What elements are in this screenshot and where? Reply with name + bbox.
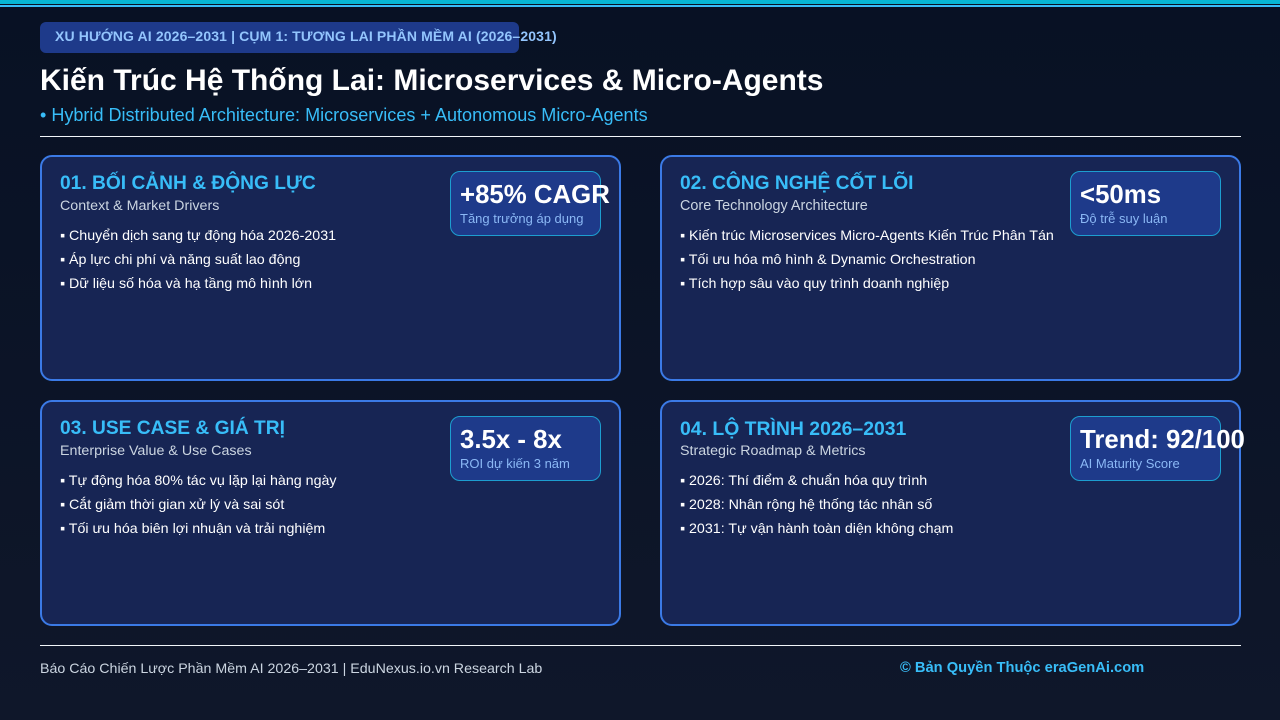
bullet list: ▪ 2031: Tự vận hành toàn diện không chạm bbox=[680, 521, 953, 537]
metric callout: ROI dự kiến 3 năm bbox=[460, 456, 570, 471]
panel subheading: Core Technology Architecture bbox=[680, 198, 868, 214]
panel: 02 core technology bbox=[660, 155, 1241, 381]
bullet list: ▪ Tối ưu hóa mô hình & Dynamic Orchestration bbox=[680, 252, 976, 268]
panel heading: 01. BỐI CẢNH & ĐỘNG LỰC bbox=[60, 173, 316, 194]
metric callout: 3.5x - 8x bbox=[460, 426, 562, 454]
panel subheading: Strategic Roadmap & Metrics bbox=[680, 443, 866, 459]
bullet list: ▪ Áp lực chi phí và năng suất lao động bbox=[60, 252, 300, 268]
bullet list: ▪ 2026: Thí điểm & chuẩn hóa quy trình bbox=[680, 473, 927, 489]
bullet list: ▪ Kiến trúc Microservices Micro-Agents Kiến Trúc Phân Tán bbox=[680, 228, 1054, 244]
metric callout bbox=[1070, 416, 1221, 481]
title: Kiến Trúc Hệ Thống Lai: Microservices & Micro-Agents bbox=[40, 64, 824, 97]
footer copyright: © Bản Quyền Thuộc eraGenAi.com bbox=[900, 660, 1144, 676]
metric callout: <50ms bbox=[1080, 181, 1161, 209]
panel heading: 03. USE CASE & GIÁ TRỊ bbox=[60, 418, 285, 439]
panel: 01 context bbox=[40, 155, 621, 381]
bullet list: ▪ Chuyển dịch sang tự động hóa 2026-2031 bbox=[60, 228, 336, 244]
metric callout: AI Maturity Score bbox=[1080, 456, 1180, 471]
metric callout bbox=[450, 416, 601, 481]
bullet list bbox=[680, 473, 953, 537]
panel: 03 use cases bbox=[40, 400, 621, 626]
badge: series label bbox=[40, 22, 519, 53]
footer source text: Báo Cáo Chiến Lược Phần Mềm AI 2026–2031 | EduNexus.io.vn Research Lab bbox=[40, 661, 542, 677]
bullet list: ▪ 2028: Nhân rộng hệ thống tác nhân số bbox=[680, 497, 932, 513]
badge: series label: XU HƯỚNG AI 2026–2031 | CỤM 1: TƯƠNG LAI PHẦN MỀM AI (2026–2031) bbox=[55, 28, 557, 44]
metric callout: +85% CAGR bbox=[460, 181, 610, 209]
bullet list: ▪ Tối ưu hóa biên lợi nhuận và trải nghiệm bbox=[60, 521, 325, 537]
footer divider bbox=[40, 645, 1241, 646]
metric callout: Độ trễ suy luận bbox=[1080, 211, 1167, 226]
metric callout bbox=[1070, 171, 1221, 236]
bullet list bbox=[60, 228, 336, 292]
bullet list: ▪ Tự động hóa 80% tác vụ lặp lại hàng ngày bbox=[60, 473, 337, 489]
metric callout: Tăng trưởng áp dụng bbox=[460, 211, 583, 226]
bullet list: ▪ Cắt giảm thời gian xử lý và sai sót bbox=[60, 497, 284, 513]
bullet list: ▪ Dữ liệu số hóa và hạ tầng mô hình lớn bbox=[60, 276, 312, 292]
panel subheading: Enterprise Value & Use Cases bbox=[60, 443, 252, 459]
bullet list: ▪ Tích hợp sâu vào quy trình doanh nghiệp bbox=[680, 276, 949, 292]
bullet list bbox=[60, 473, 337, 537]
subtitle: • Hybrid Distributed Architecture: Microservices + Autonomous Micro-Agents bbox=[40, 105, 648, 125]
panel subheading: Context & Market Drivers bbox=[60, 198, 219, 214]
header divider bbox=[40, 136, 1241, 137]
metric callout: Trend: 92/100 bbox=[1080, 426, 1245, 454]
bullet list bbox=[680, 228, 1054, 292]
metric callout bbox=[450, 171, 601, 236]
top accent bars bbox=[0, 0, 1280, 7]
panel: 04 roadmap bbox=[660, 400, 1241, 626]
panel heading: 04. LỘ TRÌNH 2026–2031 bbox=[680, 418, 906, 440]
panel heading: 02. CÔNG NGHỆ CỐT LÕI bbox=[680, 173, 913, 194]
